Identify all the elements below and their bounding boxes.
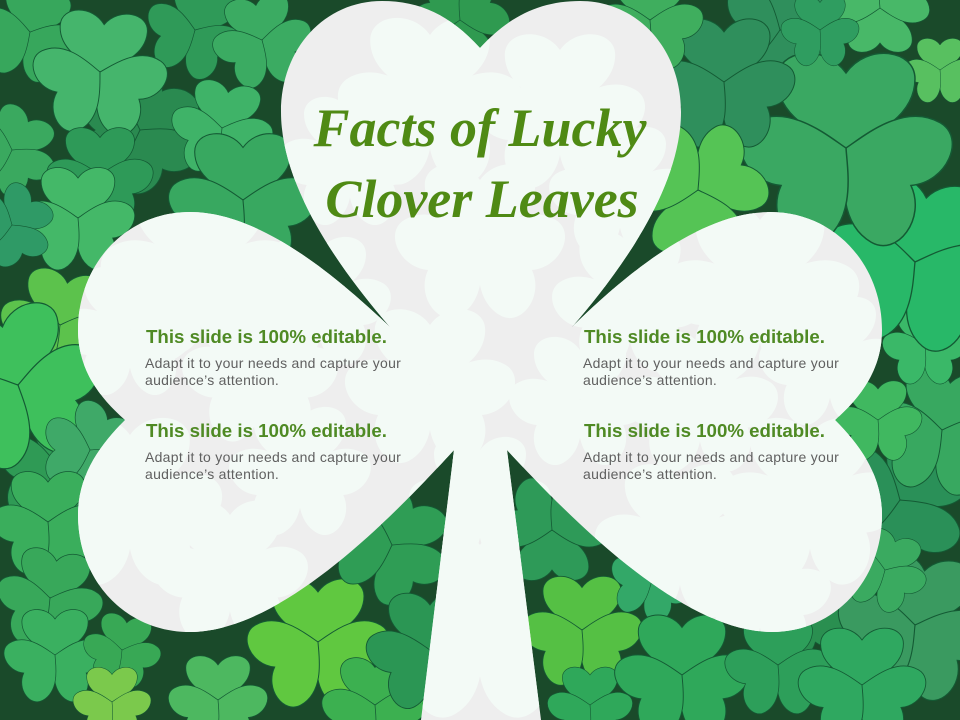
text block: lower right: Adapt it to your needs and capture your (583, 449, 839, 465)
text block: lower left (145, 420, 401, 482)
text block: upper left: This slide is 100% editable. (146, 326, 387, 347)
text block: lower left: audience’s attention. (145, 466, 279, 482)
title: Facts of Lucky (313, 98, 647, 158)
text block: lower left: This slide is 100% editable. (146, 420, 387, 441)
title: Clover Leaves (325, 169, 639, 229)
text block: upper right: audience’s attention. (583, 372, 717, 388)
text block: lower left: Adapt it to your needs and capture your (145, 449, 401, 465)
text block: upper left (145, 326, 401, 388)
text block: lower right: This slide is 100% editable. (584, 420, 825, 441)
text block: upper right (583, 326, 839, 388)
text block: upper right: Adapt it to your needs and capture your (583, 355, 839, 371)
text block: upper left: Adapt it to your needs and capture your (145, 355, 401, 371)
title (313, 98, 647, 229)
text block: upper left: audience’s attention. (145, 372, 279, 388)
text block: lower right: audience’s attention. (583, 466, 717, 482)
text block: upper right: This slide is 100% editable. (584, 326, 825, 347)
text block: lower right (583, 420, 839, 482)
